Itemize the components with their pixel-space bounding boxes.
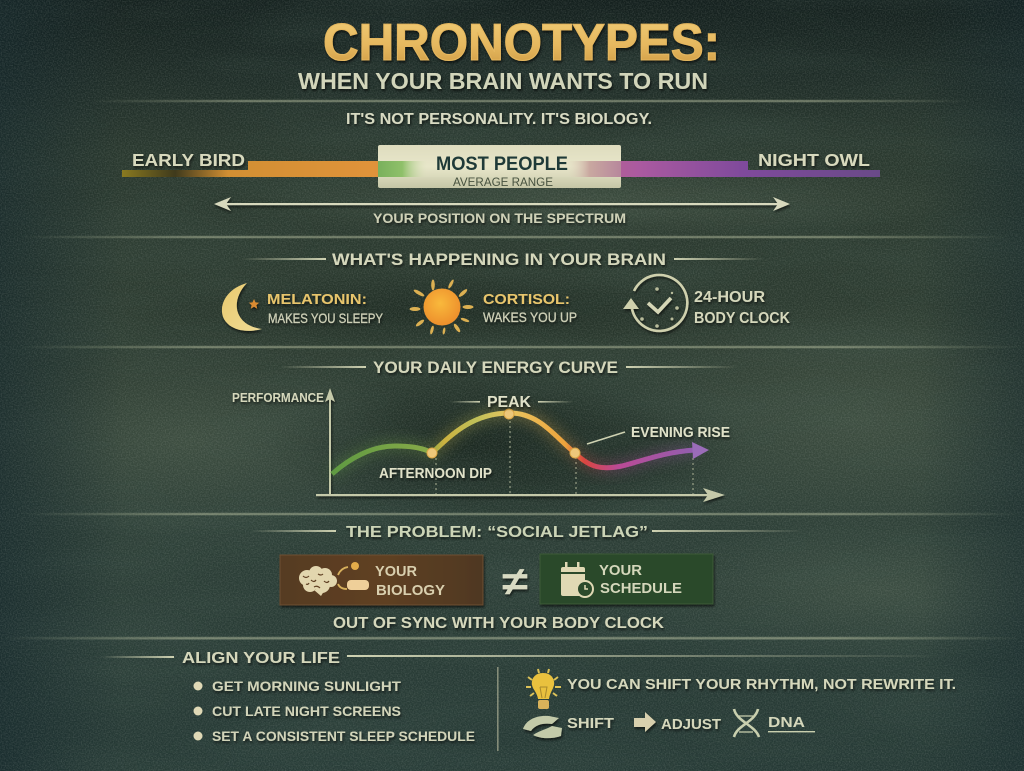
divider [20,513,1024,515]
divider [20,236,1010,238]
not equal sign: ≠ [502,560,528,604]
icon: brain [299,562,369,596]
performance label: PERFORMANCE [232,391,324,405]
dna label [768,714,815,732]
icon: adjust arrow [634,712,656,732]
align heading: ALIGN YOUR LIFE [182,650,340,667]
peak label [450,394,574,411]
vertical divider [497,667,499,751]
cortisol text: CORTISOL: [483,291,570,308]
divider [90,100,970,102]
schedule text: YOUR [599,562,642,579]
brain heading: WHAT'S HAPPENING IN YOUR BRAIN [332,250,666,269]
spectrum caption: YOUR POSITION ON THE SPECTRUM [373,211,626,226]
body clock text: 24-HOUR [694,289,765,306]
icon: dna [734,709,759,737]
out of sync caption: OUT OF SYNC WITH YOUR BODY CLOCK [333,615,665,632]
melatonin text [267,291,384,326]
melatonin text: MAKES YOU SLEEPY [268,310,384,326]
cortisol text: WAKES YOU UP [483,309,577,325]
schedule text: SCHEDULE [600,580,682,597]
dna label: DNA [768,714,805,731]
evening rise label: EVENING RISE [631,425,730,441]
spectrum bar [122,145,880,189]
cortisol text [483,291,577,325]
icon: sun [410,279,474,335]
biology text [375,563,445,599]
schedule text [599,562,682,597]
icon: shift [523,716,562,738]
biology text: BIOLOGY [376,582,445,599]
curve glow [332,413,695,474]
most people label: MOST PEOPLE [436,154,568,175]
drop lines [436,416,693,494]
adjust label: ADJUST [661,716,721,733]
arrow head [692,442,709,459]
problem heading: THE PROBLEM: “SOCIAL JETLAG” [346,524,648,541]
divider [0,637,1024,639]
curve points [427,409,580,458]
peak label: PEAK [487,394,532,411]
body clock text [694,289,791,327]
panel: your biology [280,555,483,605]
night owl label: NIGHT OWL [758,150,870,170]
energy curve chart [232,388,730,502]
icon: calendar [561,562,593,597]
axes [316,388,725,502]
curve line [332,413,695,474]
tips list [194,678,475,744]
average range label: AVERAGE RANGE [453,177,553,189]
icon: moon [222,283,262,331]
position arrow [214,197,790,211]
takeaway text: YOU CAN SHIFT YOUR RHYTHM, NOT REWRITE IT. [567,677,956,693]
tips list: SET A CONSISTENT SLEEP SCHEDULE [212,728,475,744]
biology text: YOUR [375,563,417,580]
melatonin text: MELATONIN: [267,291,367,308]
tips list: CUT LATE NIGHT SCREENS [212,703,401,719]
title: CHRONOTYPES: [323,14,720,72]
body clock text: BODY CLOCK [694,310,791,327]
subtitle: WHEN YOUR BRAIN WANTS TO RUN [298,68,708,94]
panel: your schedule [540,554,713,604]
curve heading: YOUR DAILY ENERGY CURVE [373,359,618,377]
shift label: SHIFT [567,715,614,732]
early bird label: EARLY BIRD [132,150,245,170]
tagline: IT'S NOT PERSONALITY. IT'S BIOLOGY. [346,111,652,128]
icon: light bulb [526,669,561,709]
evening rise label [587,425,730,444]
afternoon dip label: AFTERNOON DIP [379,466,492,482]
most people box [378,145,621,189]
icon: clock [623,275,687,331]
tips list: GET MORNING SUNLIGHT [212,678,401,694]
divider [20,346,1024,348]
